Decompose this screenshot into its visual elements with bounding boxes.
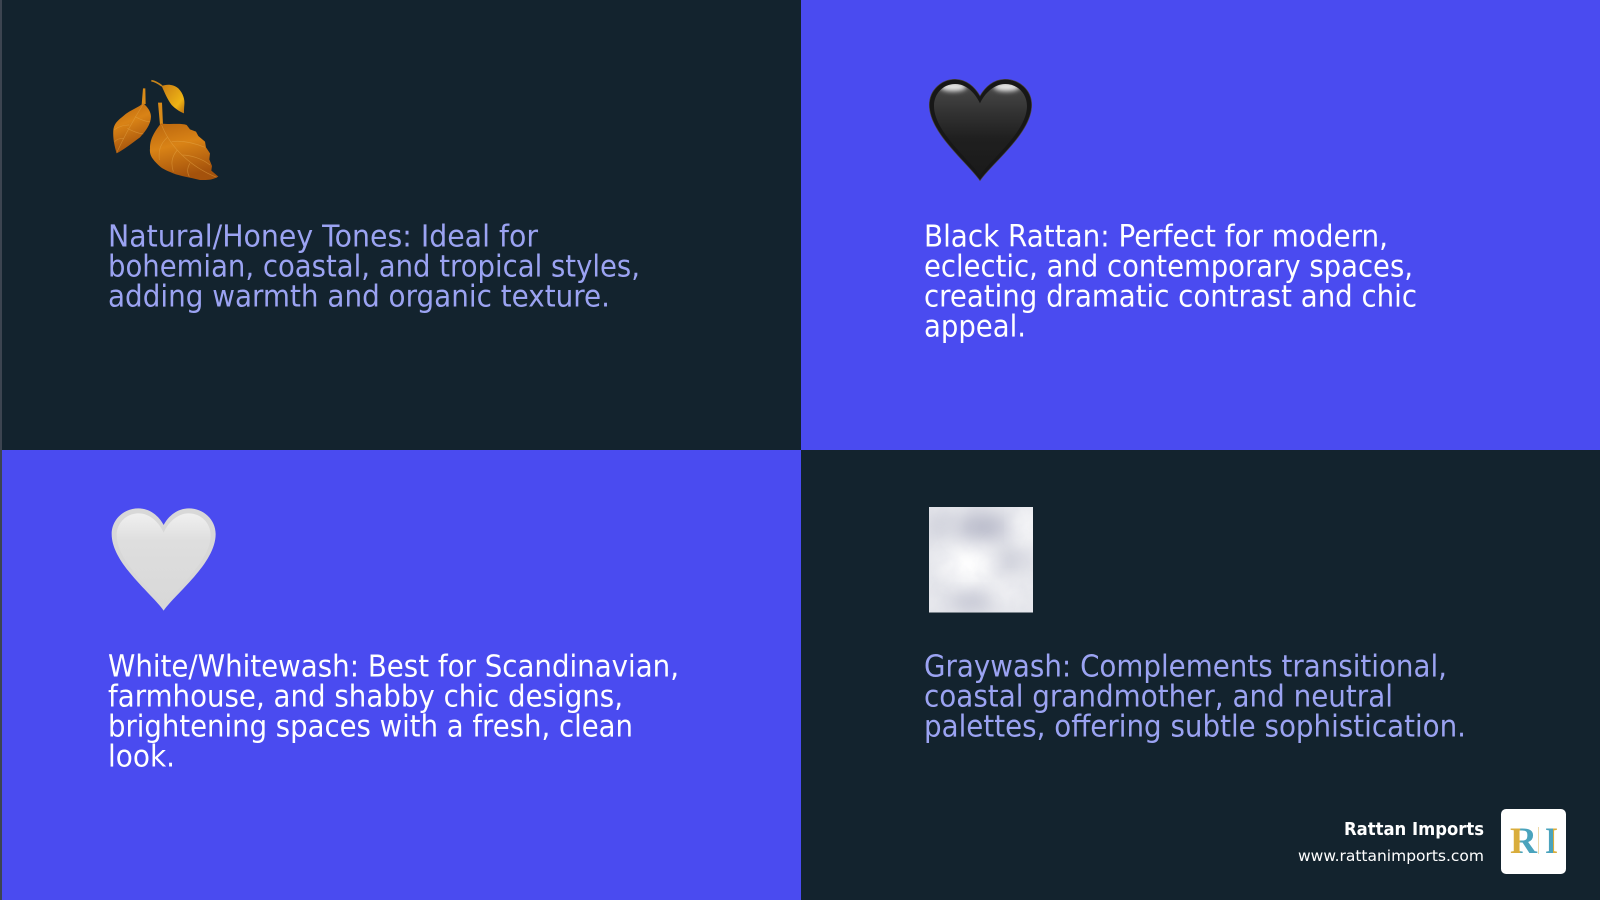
text: white whitewash: farmhouse, and shabby chic designs, <box>108 680 623 714</box>
brand url: www.rattanimports.com <box>1298 847 1484 865</box>
text: white whitewash: look. <box>108 740 175 774</box>
text: graywash <box>924 650 1466 744</box>
text: black rattan: appeal. <box>924 310 1026 344</box>
icon: fallen leaves <box>113 81 218 180</box>
text: white whitewash <box>108 650 679 774</box>
panel: graywash <box>801 450 1600 900</box>
text: white whitewash: White/Whitewash: Best for Scandinavian, <box>108 650 679 684</box>
logo <box>1501 809 1566 874</box>
panel: white whitewash <box>2 450 801 900</box>
brand footer <box>1298 809 1566 874</box>
text: graywash: Graywash: Complements transitional, <box>924 650 1447 684</box>
icon: black heart <box>929 79 1032 181</box>
text: black rattan: Black Rattan: Perfect for modern, <box>924 220 1388 254</box>
logo: R <box>1510 821 1538 862</box>
panel: black rattan <box>801 0 1600 450</box>
brand name: Rattan Imports <box>1344 820 1484 840</box>
text: black rattan: creating dramatic contrast and chic <box>924 280 1417 314</box>
logo: I <box>1545 821 1558 862</box>
icon: graywash marble swatch <box>926 507 1036 613</box>
text: black rattan <box>924 220 1417 344</box>
text: natural honey tones <box>108 220 640 314</box>
text: natural honey tones: adding warmth and organic texture. <box>108 280 610 314</box>
icon: white heart <box>112 508 216 611</box>
text: white whitewash: brightening spaces with a fresh, clean <box>108 710 633 744</box>
text: graywash: palettes, offering subtle sophistication. <box>924 710 1466 744</box>
text: black rattan: eclectic, and contemporary spaces, <box>924 250 1413 284</box>
text: natural honey tones: bohemian, coastal, and tropical styles, <box>108 250 640 284</box>
text: graywash: coastal grandmother, and neutral <box>924 680 1393 714</box>
text: natural honey tones: Natural/Honey Tones: Ideal for <box>108 220 539 254</box>
panel: natural honey tones <box>2 0 801 450</box>
